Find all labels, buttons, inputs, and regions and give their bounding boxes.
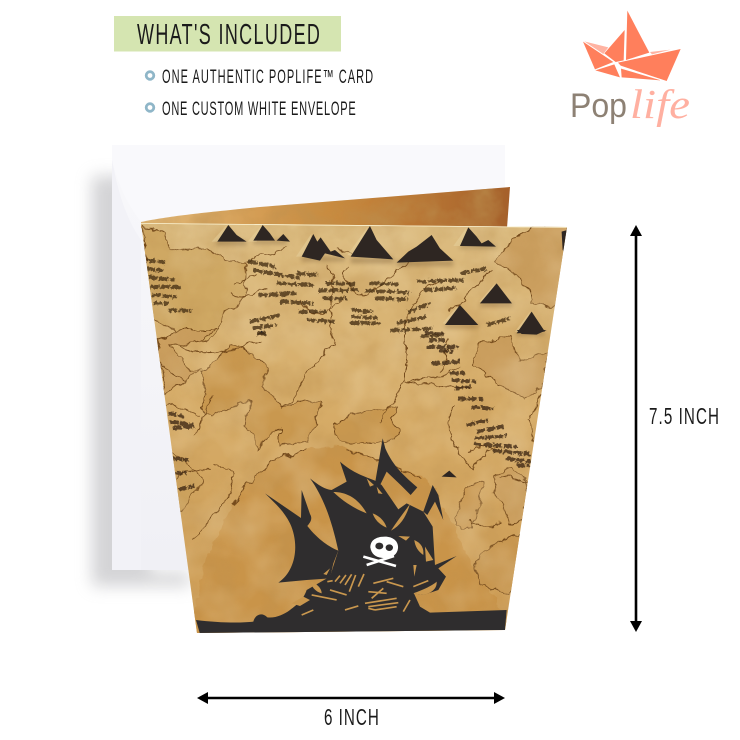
card back panel	[141, 187, 510, 228]
logo wordmark: Pop	[570, 87, 627, 125]
pirate ship	[196, 438, 507, 634]
logo wordmark	[570, 81, 690, 127]
map hill clusters	[146, 260, 510, 337]
logo wordmark: life	[630, 81, 690, 127]
height arrow	[630, 225, 642, 632]
card front: pirate map	[130, 215, 580, 640]
parchment texture	[142, 224, 564, 620]
mountain ground shadows	[217, 240, 545, 336]
parchment light patches	[142, 224, 566, 622]
poplife logo	[570, 11, 690, 127]
map mountains	[212, 225, 567, 336]
width label: 6 INCH	[324, 705, 379, 731]
envelope shadow	[92, 176, 190, 586]
mountain dark faces	[217, 225, 567, 333]
heading band: what's included: WHAT'S INCLUDED	[137, 19, 320, 51]
ship silhouette	[196, 438, 507, 634]
icon: origami boat	[583, 11, 681, 81]
included items list: ONE AUTHENTIC POPLIFE™ CARD	[162, 67, 373, 88]
included items list	[146, 67, 373, 120]
height label: 7.5 INCH	[649, 404, 719, 430]
parchment base	[130, 215, 580, 640]
included items list: ONE CUSTOM WHITE ENVELOPE	[162, 99, 356, 120]
width arrow	[197, 692, 505, 704]
mountain light slopes	[212, 225, 530, 333]
lower sea band	[190, 446, 520, 640]
map rivers and borders	[150, 247, 545, 540]
hull carvings	[302, 574, 428, 615]
sail and hull cutouts	[292, 478, 437, 606]
white envelope	[112, 145, 505, 570]
skull and crossbones	[363, 537, 398, 566]
card top fold edge	[141, 223, 567, 227]
map landmasses	[141, 226, 567, 595]
